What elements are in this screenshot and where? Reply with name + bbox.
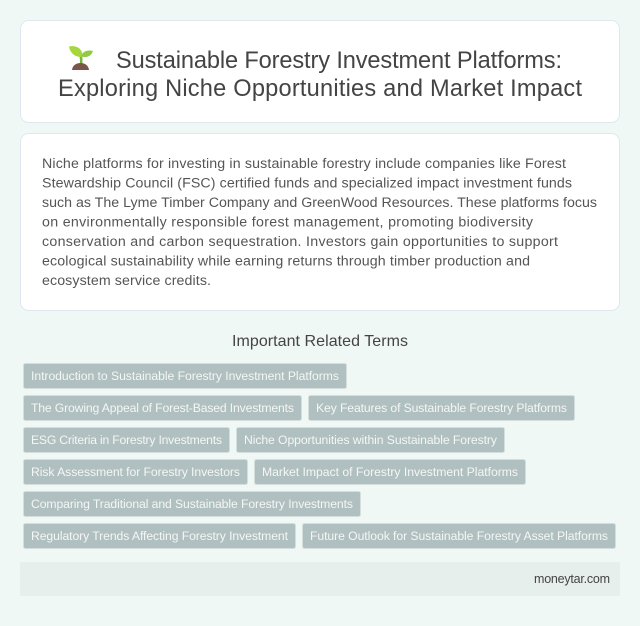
tag xyxy=(308,396,574,420)
panel: title xyxy=(20,20,620,122)
tag xyxy=(254,460,526,484)
description text: Stewardship Council (FSC) certified funds and specialized impact investment funds xyxy=(42,176,572,192)
tag: The Growing Appeal of Forest-Based Investments xyxy=(31,401,294,415)
tag xyxy=(24,428,230,452)
description text: conservation and carbon sequestration. Investors gain opportunities to support xyxy=(42,234,558,250)
description text: ecosystem service credits. xyxy=(42,273,211,289)
title text: Exploring Niche Opportunities and Market Impact xyxy=(58,76,582,102)
heading: related terms: Important Related Terms xyxy=(232,333,408,350)
tag xyxy=(24,364,346,388)
panel: description xyxy=(20,134,620,310)
title text: Sustainable Forestry Investment Platforms: xyxy=(116,48,562,74)
tag: Regulatory Trends Affecting Forestry Investment xyxy=(31,529,289,543)
tag: Future Outlook for Sustainable Forestry Asset Platforms xyxy=(310,529,608,543)
tag xyxy=(24,524,296,548)
tag xyxy=(302,524,616,548)
tag xyxy=(24,492,360,516)
tag: Market Impact of Forestry Investment Platforms xyxy=(262,465,518,479)
description text: on environmentally responsible forest management, promoting biodiversity xyxy=(42,214,534,230)
title text xyxy=(58,48,582,102)
tag: Risk Assessment for Forestry Investors xyxy=(31,465,240,479)
icon: seedling xyxy=(69,46,93,70)
description text: ecological sustainability while earning returns through timber production and xyxy=(42,254,530,270)
tag xyxy=(24,460,248,484)
footer xyxy=(20,562,620,596)
description text xyxy=(42,156,597,289)
description text: such as The Lyme Timber Company and GreenWood Resources. These platforms focus xyxy=(42,195,597,211)
description text: Niche platforms for investing in sustainable forestry include companies like Forest xyxy=(42,156,566,172)
tag list xyxy=(24,364,616,548)
tag xyxy=(24,396,302,420)
tag: Comparing Traditional and Sustainable Forestry Investments xyxy=(31,497,353,511)
tag: Niche Opportunities within Sustainable Forestry xyxy=(244,433,498,447)
tag: Key Features of Sustainable Forestry Platforms xyxy=(316,401,567,415)
footer source: moneytar.com xyxy=(534,572,610,586)
tag: Introduction to Sustainable Forestry Investment Platforms xyxy=(31,369,339,383)
tag xyxy=(236,428,504,452)
tag: ESG Criteria in Forestry Investments xyxy=(31,433,222,447)
